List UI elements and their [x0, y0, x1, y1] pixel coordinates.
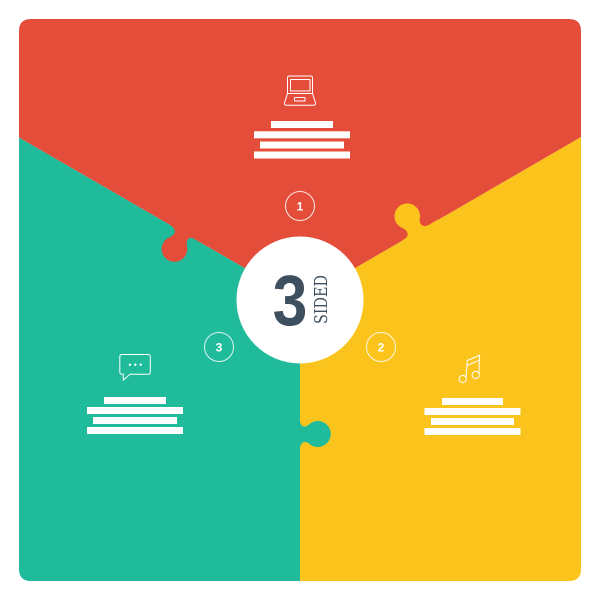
panel: yellow right piece	[300, 137, 581, 581]
icon: speech bubble	[120, 354, 150, 380]
panel: green left piece	[19, 138, 331, 581]
number badge 2	[366, 332, 396, 362]
rotated label SIDED: SIDED	[312, 275, 332, 324]
placeholder text bars: green panel	[87, 397, 183, 434]
number badge 3: 3	[216, 340, 223, 354]
number badge 1	[286, 192, 314, 220]
panel: red top piece	[19, 19, 581, 300]
placeholder text bars: yellow panel	[424, 398, 520, 435]
number badge 1: 1	[297, 200, 304, 214]
placeholder text bars: red panel	[254, 121, 350, 158]
number badge 3	[204, 332, 234, 362]
icon: laptop	[284, 76, 316, 105]
icon: music notes	[459, 355, 480, 383]
center circle badge	[236, 236, 364, 364]
big number 3: 3	[273, 261, 307, 341]
number badge 2: 2	[378, 340, 385, 354]
puzzle tab: yellow into red	[394, 203, 446, 246]
